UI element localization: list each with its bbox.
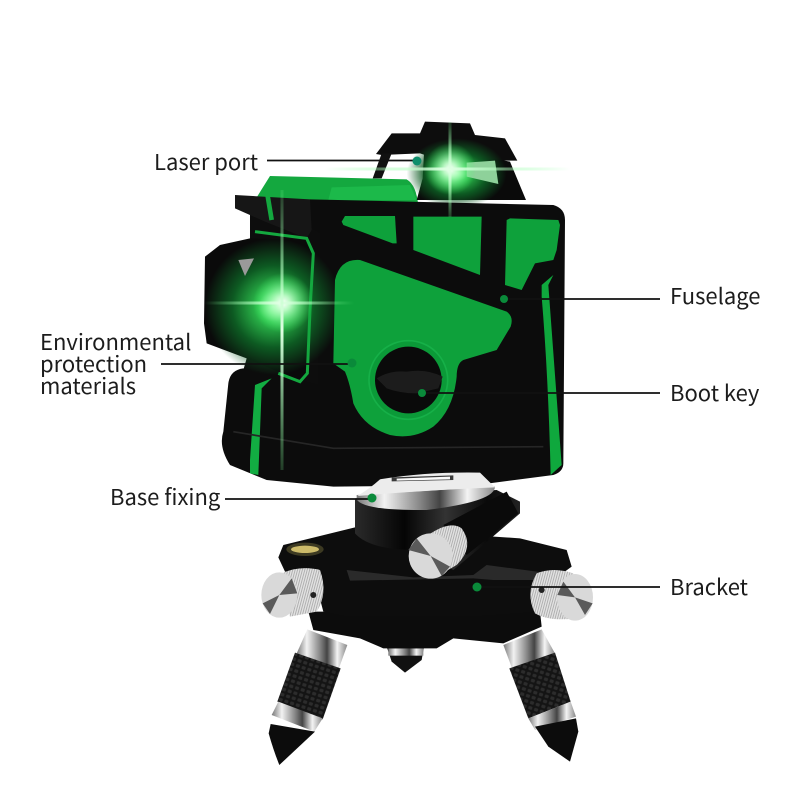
- top laser flare: [325, 122, 570, 217]
- left leg: [269, 629, 347, 765]
- label: fuselage: Fuselage: [670, 279, 760, 311]
- main housing: [222, 199, 565, 487]
- left flare glow: [253, 273, 313, 333]
- callout: bracket: [472, 570, 748, 602]
- top green cover: [257, 176, 418, 208]
- cylinder: [355, 490, 520, 570]
- left knob: [261, 568, 323, 618]
- left leg lower band: [272, 702, 323, 732]
- laser level body: [204, 122, 565, 487]
- boot key dial: [375, 347, 442, 413]
- silver disc: [357, 473, 495, 510]
- right leg: [503, 629, 578, 762]
- vertical green trim on cover: [267, 190, 272, 220]
- callout: environmental protection materials: protection: [40, 347, 147, 379]
- front knob cap: [409, 533, 453, 579]
- dial ring: [369, 341, 448, 419]
- callout: laser port: [154, 145, 422, 177]
- left knob barrel: [282, 568, 323, 617]
- disc holes: [392, 475, 453, 481]
- rear spike centre: [387, 647, 424, 673]
- label: bracket: Bracket: [670, 570, 748, 602]
- left leg tip: [269, 724, 315, 765]
- boot key wing: [377, 371, 443, 393]
- right knob cap: [557, 574, 593, 621]
- disc top: [357, 473, 495, 496]
- right knob barrel: [530, 570, 575, 619]
- callout: base fixing: [110, 480, 376, 512]
- lower-left green strip: [250, 378, 272, 475]
- left handle: [235, 195, 312, 238]
- right knob: [530, 570, 593, 621]
- bubble level: [286, 543, 324, 556]
- left leg grip: [277, 653, 341, 719]
- left knob cap: [261, 572, 297, 618]
- right green strip: [542, 275, 562, 475]
- front knob: [408, 492, 518, 579]
- main plate: [278, 527, 572, 617]
- lower plate: [308, 612, 542, 648]
- top laser head: [373, 122, 526, 208]
- tribrach base: [261, 473, 593, 765]
- top flare glow: [424, 143, 476, 195]
- callout: environmental protection materials: [40, 325, 356, 401]
- head lens housing: [417, 153, 526, 200]
- right leg tip: [535, 718, 578, 762]
- callout: boot key: [418, 376, 760, 408]
- label: environmental protection materials: Environmental: [40, 325, 191, 357]
- disc rim: [357, 487, 495, 510]
- large green panel: [333, 260, 512, 436]
- label: boot key: Boot key: [670, 376, 760, 408]
- left lens glow: [205, 238, 342, 375]
- top head lens glow: [407, 138, 507, 208]
- front knob barrel: [443, 492, 518, 555]
- label: base fixing: Base fixing: [110, 480, 221, 512]
- green panel right: [505, 218, 560, 290]
- right leg silver collar: [503, 629, 555, 670]
- left laser head: [204, 238, 313, 381]
- green panel left: [342, 216, 397, 243]
- body rear filler: [243, 210, 322, 388]
- head roof: [376, 122, 517, 161]
- label: laser port: Laser port: [154, 145, 258, 177]
- left leg silver collar: [297, 629, 347, 670]
- callout: fuselage: [500, 279, 760, 311]
- left laser flare: [204, 190, 354, 470]
- left head green trim: [255, 232, 313, 382]
- right leg lower band: [528, 702, 576, 730]
- right leg grip: [509, 653, 571, 718]
- callout: environmental protection materials: materials: [40, 369, 136, 401]
- bottom seam line: [233, 432, 543, 448]
- head left strut: [373, 153, 392, 178]
- green panel middle: [413, 217, 482, 275]
